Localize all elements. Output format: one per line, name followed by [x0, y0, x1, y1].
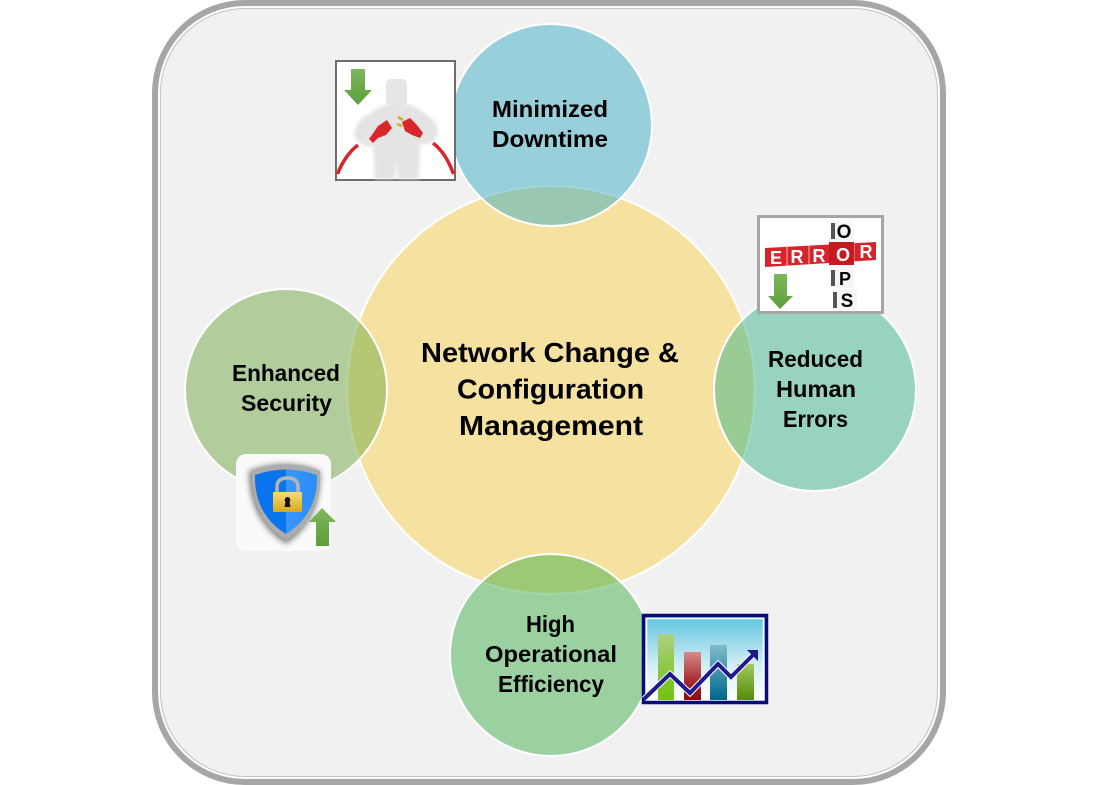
- title: Configuration: [457, 374, 644, 404]
- circle: high operational efficiency: [450, 554, 652, 756]
- icon: bar chart with trend arrow: [644, 616, 766, 702]
- icon: error oops blocks: O: [836, 245, 850, 265]
- icon: green up arrow: [309, 508, 336, 546]
- label: high operational efficiency: [485, 611, 617, 697]
- circle: minimized downtime: [450, 24, 652, 226]
- label: high operational efficiency: Efficiency: [498, 671, 604, 697]
- central circle: [347, 186, 755, 594]
- label: reduced human errors: Human: [776, 376, 856, 402]
- icon: person unplugging cable: [336, 61, 455, 180]
- title: Management: [459, 410, 643, 441]
- label: enhanced security: [232, 360, 340, 416]
- icon: green down arrow: [344, 69, 372, 105]
- label: minimized downtime: Minimized: [492, 96, 608, 122]
- icon: error oops blocks: [758, 216, 882, 312]
- label: enhanced security: Enhanced: [232, 360, 340, 386]
- icon: error oops blocks: O: [837, 222, 851, 243]
- icon: error oops blocks: R: [860, 242, 872, 262]
- icon: security shield: [236, 454, 336, 551]
- circle: enhanced security: [185, 289, 387, 491]
- circle: reduced human errors: [714, 289, 916, 491]
- bars: [658, 634, 674, 700]
- title: [421, 337, 679, 441]
- icon: error oops blocks: E: [770, 248, 782, 268]
- icon: error oops blocks: S: [841, 291, 853, 312]
- label: minimized downtime: [492, 96, 608, 152]
- label: reduced human errors: Reduced: [768, 346, 863, 372]
- label: enhanced security: Security: [241, 390, 332, 416]
- icon: error oops blocks: P: [839, 269, 851, 289]
- label: reduced human errors: [768, 346, 863, 432]
- label: high operational efficiency: High: [526, 611, 575, 637]
- label: high operational efficiency: Operational: [485, 641, 617, 667]
- icon: error oops blocks: R: [790, 247, 804, 267]
- label: reduced human errors: Errors: [783, 406, 848, 432]
- icon: green down arrow: [768, 274, 793, 309]
- label: minimized downtime: Downtime: [492, 126, 608, 152]
- icon: error oops blocks: R: [812, 246, 826, 266]
- background panel: [155, 3, 943, 782]
- title: Network Change &: [421, 337, 679, 368]
- trend line: [644, 654, 754, 699]
